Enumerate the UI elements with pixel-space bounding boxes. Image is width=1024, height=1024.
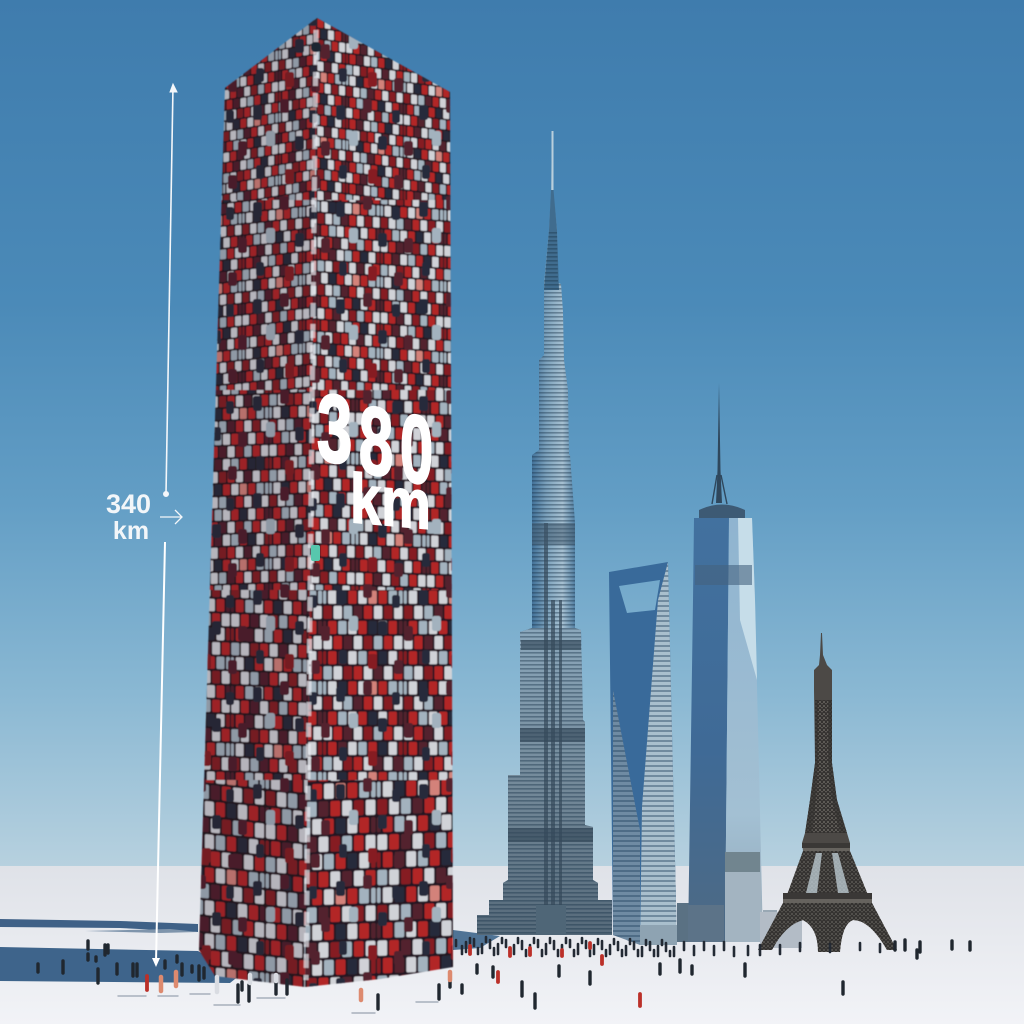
building: Burj Khalifa <box>477 131 612 935</box>
tower height label: 3 <box>317 374 352 485</box>
pale figures <box>217 975 276 992</box>
dark figures <box>38 940 970 1009</box>
building: Eiffel Tower <box>758 633 897 952</box>
height measure: 340 km <box>106 84 182 967</box>
label: 340 <box>106 489 151 519</box>
tower height label <box>317 374 433 545</box>
antenna and crown <box>716 383 722 503</box>
red figures <box>147 943 640 1006</box>
right face <box>300 0 460 1000</box>
lower legs <box>758 893 897 952</box>
upper arrow line <box>164 84 177 496</box>
tiled faces <box>190 0 460 1000</box>
height measure: 340 km: km <box>113 517 149 545</box>
tower shadows on ground <box>0 919 500 983</box>
tower height label: km <box>350 460 431 545</box>
crowd band by the towers <box>456 937 880 956</box>
building: Shanghai World Financial Center <box>609 562 677 945</box>
building: One World Trade Center <box>677 383 777 942</box>
snowy ground <box>0 866 1024 1024</box>
tower height label: 8 <box>359 386 393 498</box>
upper shaft <box>802 633 850 843</box>
lower arrow line <box>156 542 165 962</box>
tower of people <box>190 0 460 1000</box>
left face <box>198 18 318 988</box>
middle section <box>787 843 868 895</box>
ground shadows <box>118 994 438 1013</box>
tower height label: 0 <box>400 394 433 505</box>
orange and pink figures <box>161 972 450 1000</box>
side arrow <box>160 510 182 524</box>
crowd of people <box>38 937 970 1013</box>
podium <box>677 903 689 942</box>
